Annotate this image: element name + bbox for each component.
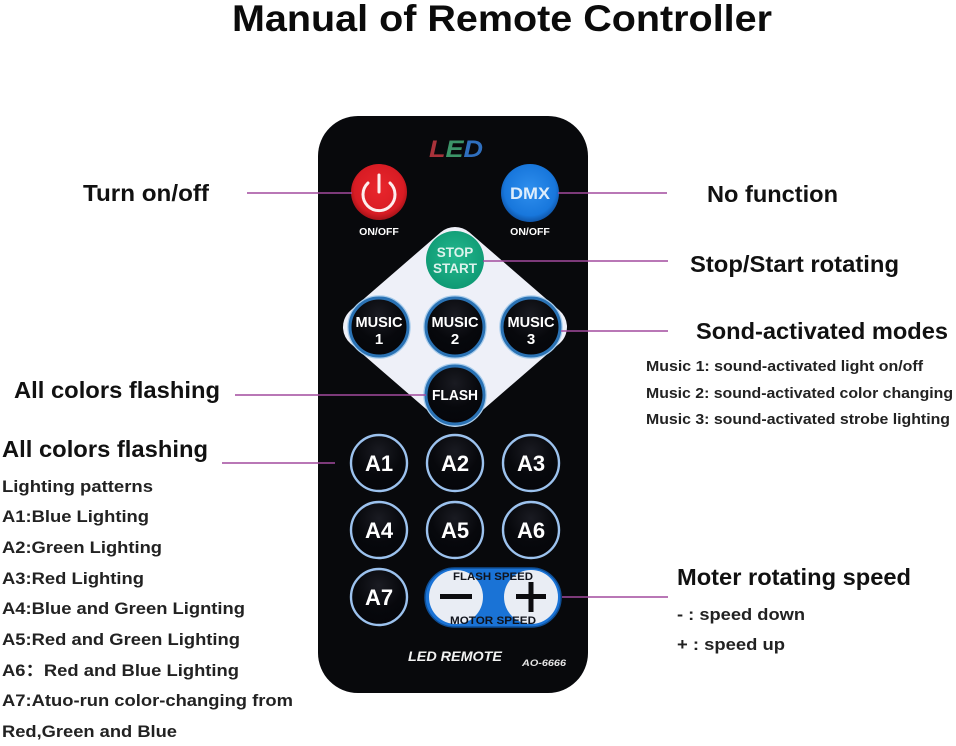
motor speed text block: Moter rotating speed [677,564,911,590]
A3 button [503,435,559,491]
flash button: FLASH [432,387,478,404]
A6 button: A6 [517,518,545,543]
leader line: DMX [558,192,667,194]
lighting patterns text block: A5:Red and Green Lighting [2,630,240,649]
motor speed text block [677,564,911,654]
model number: AO-6666 [521,658,567,668]
music 1 button [348,296,410,358]
lighting patterns text block: A7:Atuo-run color-changing from [2,691,293,710]
label: all colors flashing: All colors flashing [14,377,220,403]
remote body [318,116,588,693]
lighting patterns text block: A6：Red and Blue Lighting [2,661,239,680]
lighting patterns text block: Red,Green and Blue [2,722,177,741]
flash button [424,364,486,426]
A4 button: A4 [365,518,394,543]
label: no function: No function [707,181,838,207]
stop start button: START [433,261,478,276]
music 1 button: MUSIC [356,314,403,331]
speed control: FLASH SPEED [453,571,533,583]
lighting patterns text block: A4:Blue and Green Lignting [2,599,245,618]
label: stop/start rotating: Stop/Start rotating [690,251,899,277]
remote controller [318,116,588,693]
stop start button [426,231,484,289]
leader line: A buttons [222,462,335,464]
diamond panel [365,249,545,405]
lighting patterns text block [2,436,293,741]
music 2 button: 2 [451,331,459,348]
LED logo: LED [429,136,483,163]
A5 button [427,502,483,558]
lighting patterns text block: All colors flashing [2,436,208,462]
A1 button: A1 [365,451,393,476]
leader line: music [561,330,668,332]
A5 button: A5 [441,518,469,543]
music 3 button: MUSIC [508,314,555,331]
DMX button [501,164,559,222]
A2 button [427,435,483,491]
A7 button: A7 [365,585,393,610]
power label: ON/OFF [359,226,399,238]
DMX label: ON/OFF [510,226,550,238]
music modes text block: Music 2: sound-activated color changing [646,385,953,402]
A6 button [503,502,559,558]
lighting patterns text block: A3:Red Lighting [2,569,144,588]
leader line: stop start [483,260,668,262]
motor speed text block: - : speed down [677,605,805,624]
lighting patterns text block: A2:Green Lighting [2,538,162,557]
power button [351,164,407,220]
music 3 button [500,296,562,358]
leader line: power [247,192,352,194]
A4 button [351,502,407,558]
motor speed text block: + : speed up [677,635,785,654]
label: turn on/off: Turn on/off [83,180,209,206]
music modes text block: Music 1: sound-activated light on/off [646,358,924,375]
A7 button [351,569,407,625]
A1 button [351,435,407,491]
music modes text block [646,318,953,428]
music 1 button: 1 [375,331,383,348]
speed control [425,568,561,627]
lighting patterns text block: A1:Blue Lighting [2,507,149,526]
stop start button: STOP [437,245,473,260]
music modes text block: Sond-activated modes [696,318,948,344]
LED REMOTE label: LED REMOTE [408,648,503,664]
leader line: flash [235,394,426,396]
DMX button: DMX [510,184,551,203]
music 2 button: MUSIC [432,314,479,331]
lighting patterns text block: Lighting patterns [2,477,153,496]
A3 button: A3 [517,451,545,476]
music modes text block: Music 3: sound-activated strobe lighting [646,411,950,428]
speed control: MOTOR SPEED [450,615,536,627]
music 2 button [424,296,486,358]
leader line: speed [562,596,668,598]
A2 button: A2 [441,451,469,476]
music 3 button: 3 [527,331,535,348]
